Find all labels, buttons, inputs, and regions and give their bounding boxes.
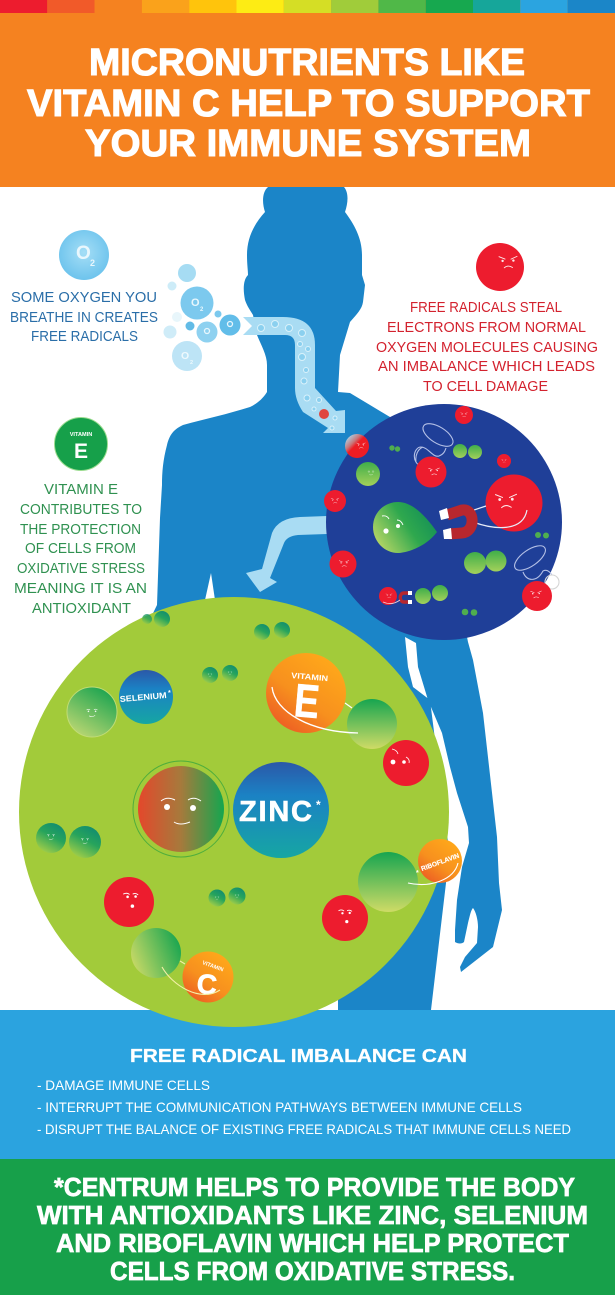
footer text: AND RIBOFLAVIN WHICH HELP PROTECT (56, 1228, 569, 1258)
vitamin C ball and molecule (131, 928, 234, 1002)
oxygen text: BREATHE IN CREATES (10, 309, 158, 326)
orbit swirls (414, 419, 559, 589)
vitamin E text (14, 481, 147, 617)
vitamin E text: CONTRIBUTES TO (20, 501, 142, 518)
oxygen bubbles: 2 (190, 360, 193, 366)
vitamin E ball and molecule (266, 653, 397, 749)
free radical text (376, 299, 598, 395)
oxygen bubbles (164, 264, 240, 371)
vitamin E icon: E (74, 440, 88, 463)
light blue panel (0, 1010, 615, 1159)
oxygen molecules (356, 444, 549, 616)
magnet (439, 508, 472, 539)
arrow: oxygen into the body (243, 317, 345, 433)
panel heading: FREE RADICAL IMBALANCE CAN (130, 1045, 467, 1066)
free radicals reacting (104, 740, 429, 941)
footer text: *CENTRUM HELPS TO PROVIDE THE BODY (54, 1172, 575, 1202)
oxygen bubbles: O (181, 350, 189, 362)
selenium ball and molecule: SELENIUM (119, 690, 167, 704)
vitamin E text: THE PROTECTION (20, 521, 141, 538)
title: VITAMIN C HELP TO SUPPORT (27, 83, 590, 125)
oxygen icon (59, 230, 109, 280)
free radical text: AN IMBALANCE WHICH LEADS (378, 358, 595, 375)
footer text: CELLS FROM OXIDATIVE STRESS. (110, 1256, 515, 1286)
vitamin E ball and molecule: VITAMIN (291, 671, 329, 683)
arrow: into the green circle (246, 516, 327, 592)
free radical text: OXYGEN MOLECULES CAUSING (376, 339, 598, 356)
oxygen text: FREE RADICALS (31, 328, 138, 345)
riboflavin ball and molecule: * (416, 870, 419, 877)
zinc ball and molecule (133, 761, 329, 858)
vitamin E icon: VITAMIN (70, 432, 92, 438)
armpit gap (205, 573, 215, 600)
vitamin E text: OF CELLS FROM (25, 540, 136, 557)
panel list: - INTERRUPT THE COMMUNICATION PATHWAYS BETWEEN IMMUNE CELLS (37, 1099, 522, 1115)
title: MICRONUTRIENTS LIKE (89, 42, 525, 84)
oxygen text (10, 289, 158, 345)
title: YOUR IMMUNE SYSTEM (85, 123, 531, 165)
footer text: WITH ANTIOXIDANTS LIKE ZINC, SELENIUM (37, 1200, 588, 1230)
vitamin E icon (54, 418, 108, 470)
free radical text: FREE RADICALS STEAL (410, 299, 562, 316)
vitamin E text: OXIDATIVE STRESS (17, 560, 145, 577)
panel list (37, 1077, 571, 1137)
selenium ball and molecule: * (168, 690, 171, 697)
oxygen text: SOME OXYGEN YOU (11, 289, 157, 306)
oxygen icon: 2 (90, 258, 95, 268)
panel list: - DISRUPT THE BALANCE OF EXISTING FREE RADICALS THAT IMMUNE CELLS NEED (37, 1121, 571, 1137)
small molecule pairs (36, 611, 290, 906)
footer text (37, 1172, 588, 1286)
title (27, 42, 590, 165)
vitamin E text: MEANING IT IS AN (14, 580, 147, 597)
selenium ball and molecule (67, 670, 173, 737)
riboflavin ball and molecule (358, 839, 462, 912)
free radical molecules (324, 406, 552, 611)
rainbow colour strip (0, 0, 615, 13)
body silhouette (140, 187, 502, 1010)
dark blue free radical circle (324, 404, 562, 640)
vitamin C ball and molecule: VITAMIN (201, 960, 224, 973)
orange title banner (0, 0, 615, 187)
vitamin E text: VITAMIN E (44, 481, 118, 498)
free radical icon (476, 243, 524, 291)
vitamin C ball and molecule: C (195, 968, 218, 1001)
free radical text: ELECTRONS FROM NORMAL (387, 319, 586, 336)
teardrop oxygen molecule (373, 502, 437, 553)
zinc ball and molecule: ZINC (239, 796, 312, 828)
vitamin E ball and molecule: E (292, 673, 322, 728)
free radical text: TO CELL DAMAGE (423, 378, 548, 395)
small magnet (383, 591, 412, 604)
panel list: - DAMAGE IMMUNE CELLS (37, 1077, 210, 1093)
antioxidant green circle (19, 597, 462, 1027)
oxygen bubbles: O (191, 297, 200, 309)
green footer panel (0, 1159, 615, 1295)
zinc ball and molecule: * (316, 798, 321, 812)
riboflavin ball and molecule: RIBOFLAVIN (420, 853, 460, 873)
oxygen bubbles: 2 (200, 307, 204, 313)
oxygen icon: O (76, 243, 91, 264)
large angry free radical (473, 474, 542, 532)
vitamin E text: ANTIOXIDANT (32, 600, 131, 617)
